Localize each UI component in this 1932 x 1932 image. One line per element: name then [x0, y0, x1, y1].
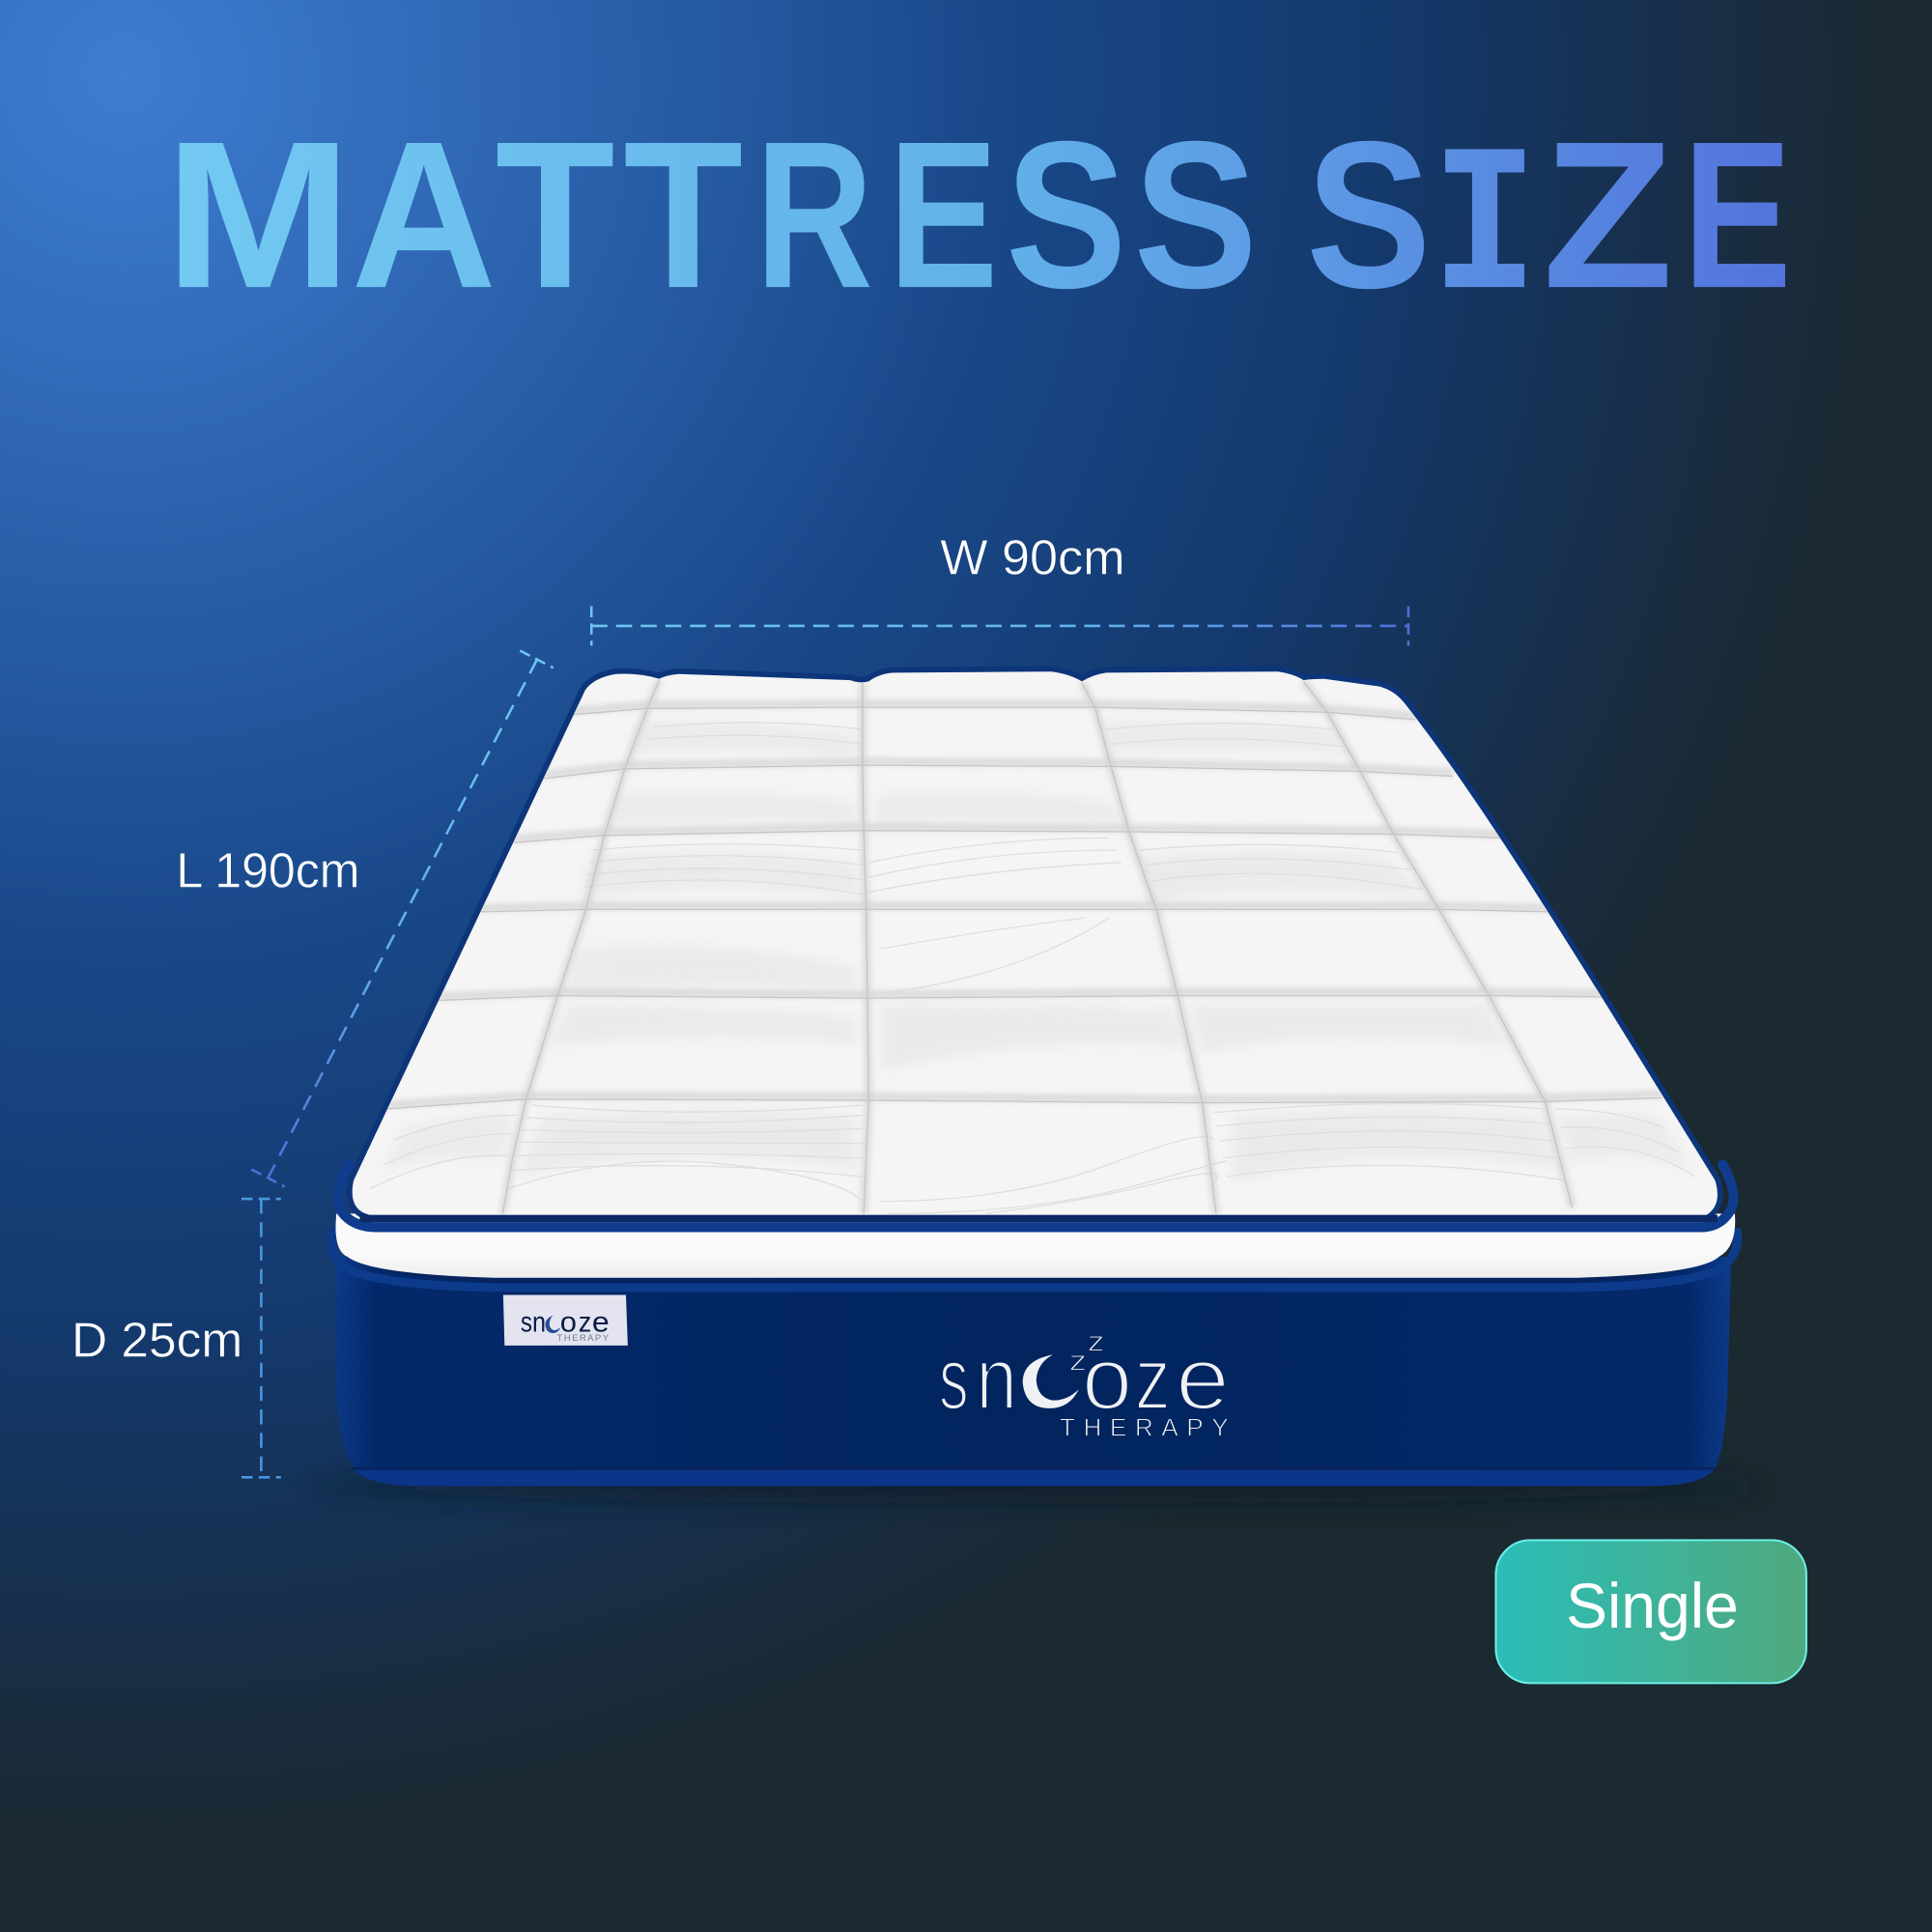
- depth label: D 25cm: [71, 1312, 242, 1367]
- sewn label tag: n: [532, 1306, 546, 1338]
- title: S: [1306, 98, 1432, 331]
- title: T: [623, 98, 743, 331]
- length dimension line: [251, 650, 554, 1186]
- sewn label tag: e: [592, 1306, 610, 1338]
- brand logo: z: [1069, 1345, 1087, 1377]
- width dimension line: [591, 607, 1408, 645]
- title: Z: [1543, 98, 1673, 331]
- title: E: [889, 98, 998, 331]
- sewn label tag: o: [560, 1306, 577, 1338]
- brand logo: e: [1176, 1330, 1230, 1429]
- seam shadows: [384, 680, 1662, 1213]
- size badge: Single: [1495, 1540, 1806, 1683]
- size badge: Single: Single: [1566, 1571, 1739, 1642]
- title: T: [496, 98, 614, 331]
- brand logo: [939, 1326, 1230, 1442]
- brand logo: z: [1088, 1326, 1104, 1358]
- title: A: [352, 98, 497, 331]
- title: R: [755, 98, 873, 331]
- brand logo: s: [939, 1330, 969, 1429]
- quilt texture bands: [382, 721, 1694, 1182]
- brand logo: z: [1135, 1330, 1171, 1429]
- quilt seams: [384, 680, 1662, 1213]
- brand logo: THERAPY: [1060, 1413, 1229, 1442]
- title: M: [164, 98, 353, 331]
- sewn label tag: z: [579, 1306, 591, 1338]
- floor shadow: [308, 1471, 1762, 1503]
- white pillow band: [335, 1213, 1735, 1278]
- mattress base: blue side panel: [331, 1233, 1738, 1486]
- quilt fine lines: [370, 723, 1695, 1213]
- title: S: [1133, 98, 1258, 331]
- brand logo: o: [1082, 1330, 1132, 1429]
- title: I: [1432, 113, 1538, 351]
- title: S: [1006, 98, 1126, 331]
- sewn label tag: s: [521, 1306, 532, 1338]
- top quilted surface: [332, 653, 1737, 1233]
- piping around top panel: [338, 671, 1734, 1227]
- sewn label tag: [503, 1295, 628, 1346]
- depth dimension line: [242, 1199, 281, 1477]
- sewn label tag: THERAPY: [557, 1333, 610, 1344]
- width label: W 90cm: [940, 529, 1125, 584]
- title: E: [1683, 98, 1792, 331]
- length label: L 190cm: [176, 842, 359, 897]
- brand logo: n: [976, 1330, 1017, 1429]
- mattress: [308, 653, 1762, 1503]
